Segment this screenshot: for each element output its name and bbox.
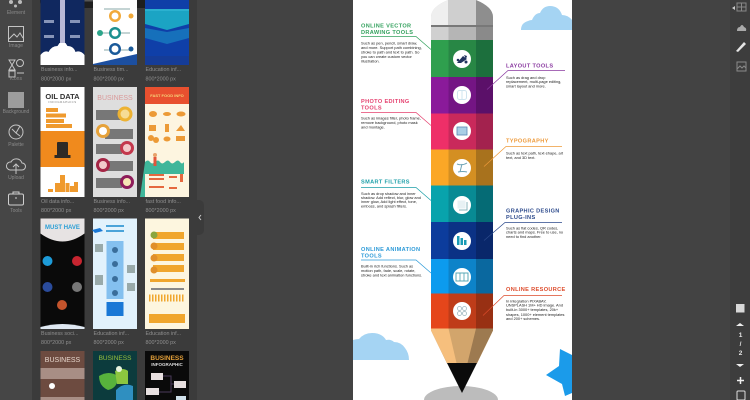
band: orange bbox=[431, 150, 493, 186]
label: tools: Tools bbox=[10, 208, 22, 214]
thumbnail: oil data bbox=[40, 87, 84, 197]
callout: layout tools: LAYOUT TOOLS bbox=[506, 64, 553, 70]
thumbnail: must have bbox=[40, 218, 84, 329]
callout: typography: TYPOGRAPHY bbox=[506, 138, 549, 144]
callout: layout tools: smart layout and more. bbox=[506, 84, 546, 88]
canvas page bbox=[353, 0, 572, 400]
callout: typography: Such as text path, text-shape, art bbox=[506, 150, 564, 156]
callout: online animation tools: Built-in rich functions. Such as bbox=[361, 264, 413, 268]
thumbnail: oil data: INFOGRAPHICS bbox=[48, 100, 77, 104]
icon: upload bbox=[6, 159, 26, 174]
thumbnail: business black: BUSINESS bbox=[150, 355, 184, 362]
callout: online animation tools: stroke and text animation functions. bbox=[361, 272, 422, 278]
thumbnail: business grey: BUSINESS bbox=[97, 95, 133, 102]
page number: / bbox=[740, 341, 742, 348]
panel handle bbox=[197, 200, 204, 235]
label: element: Element bbox=[7, 10, 26, 16]
callout: online vector drawing tools: ONLINE VECTOR bbox=[361, 24, 411, 30]
thumbnail: business black bbox=[145, 351, 189, 400]
callout: online resource bbox=[483, 287, 566, 321]
callout: layout tools: replacement, multi-page editing, bbox=[506, 79, 561, 84]
icon: smart filter bbox=[453, 196, 471, 214]
graphite tip bbox=[447, 363, 477, 393]
callout: smart filters: SMART FILTERS bbox=[361, 180, 410, 186]
thumbnail labels row 2 bbox=[41, 199, 181, 214]
thumbnail: business brown bbox=[40, 351, 84, 400]
callout: graphic design plug-ins bbox=[484, 208, 563, 240]
cloud bottom left bbox=[353, 333, 409, 360]
eraser bbox=[431, 0, 493, 40]
thumbnail: must have: MUST HAVE bbox=[45, 225, 80, 231]
label: image: Image bbox=[9, 43, 23, 49]
callout: typography bbox=[484, 138, 564, 166]
thumbnail labels row 3: Education inf... bbox=[94, 331, 129, 337]
thumbnail: business grey bbox=[93, 87, 137, 197]
callout: online vector drawing tools: stroke to path and text to path. So bbox=[361, 50, 419, 54]
thumbnail labels row 3: Education inf... bbox=[146, 331, 181, 337]
label: upload: Upload bbox=[8, 175, 24, 181]
callout: layout tools: Such as drag and drop bbox=[506, 75, 545, 80]
callout: online vector drawing tools: Such as pen, pencil, smart draw, bbox=[361, 40, 417, 46]
callout: online vector drawing tools: you can create custom vector bbox=[361, 54, 413, 59]
thumbnail: fast food: FAST FOOD INFO bbox=[150, 93, 184, 98]
icon: animation bbox=[453, 268, 471, 286]
thumbnail: education light blue bbox=[92, 218, 137, 329]
callout: photo editing tools: and montage. bbox=[361, 124, 385, 130]
thumbnail labels row 1 bbox=[41, 67, 181, 82]
page number: 1 bbox=[739, 332, 743, 339]
callout: online vector drawing tools: illustration. bbox=[361, 58, 380, 64]
callout: online resource: In integration PIXABAY, bbox=[506, 298, 547, 304]
callout: graphic design plug-ins: charts and maps. Free to use, no bbox=[506, 230, 563, 234]
callout: online resource: ONLINE RESOURCE bbox=[506, 287, 566, 293]
icon: grid bbox=[736, 304, 744, 312]
thumbnail: business timeline bbox=[93, 0, 137, 65]
callout: online animation tools: motion path, fade, scale, rotate, bbox=[361, 268, 416, 273]
wood bbox=[431, 328, 493, 364]
thumbnail labels row 1: 800*2000 px bbox=[94, 76, 124, 82]
callout: photo editing tools: Such as images filter, photo frame, bbox=[361, 116, 421, 120]
thumbnail labels row 2: 800*2000 px bbox=[94, 208, 124, 214]
icon: bar chart bbox=[453, 232, 471, 250]
thumbnail labels row 2: Business info... bbox=[94, 199, 130, 205]
icon: picture bbox=[737, 62, 746, 71]
icon: layers bbox=[732, 3, 746, 11]
icon: pen bbox=[736, 42, 746, 52]
thumbnail labels row 3: 800*2000 px bbox=[41, 340, 72, 346]
icon: copy bbox=[737, 391, 745, 400]
star bbox=[546, 349, 572, 396]
icon: photo frame bbox=[453, 122, 471, 140]
band: blue bbox=[431, 259, 493, 294]
callout: smart filters: Such as drop shadow and inner bbox=[361, 191, 416, 196]
thumbnail: business green: BUSINESS bbox=[99, 355, 132, 362]
callout: online vector drawing tools bbox=[361, 24, 431, 64]
callout: smart filters: emboss, and splash filters. bbox=[361, 204, 407, 208]
thumbnail labels row 1: Business tim... bbox=[94, 67, 129, 73]
thumbnail labels row 2: 800*2000 px bbox=[41, 208, 72, 214]
icon: element bbox=[9, 0, 22, 8]
label: palette: Palette bbox=[8, 142, 24, 148]
thumbnail labels row 3 bbox=[41, 331, 181, 346]
callout: online resource: UNSPLASH 1M+ HD image. And bbox=[506, 302, 563, 308]
callout: online resource: and 200+ schemes. bbox=[506, 316, 540, 321]
callout: online resource: shapes, 1000+ element templates bbox=[506, 312, 565, 317]
thumbnail: oil data: OIL DATA bbox=[45, 92, 80, 101]
icon: resource bbox=[453, 302, 471, 320]
thumbnail labels row 2: 800*2000 px bbox=[146, 208, 176, 214]
callout: online vector drawing tools: and more. Support path combining, bbox=[361, 45, 422, 50]
callout: smart filters: inner glow, Add light effect, tone, bbox=[361, 199, 417, 204]
icon: palette bbox=[9, 125, 23, 139]
thumbnail: fast food bbox=[140, 87, 189, 197]
band: navy bbox=[431, 222, 493, 259]
thumbnail: business navy bbox=[40, 0, 84, 65]
thumbnail labels row 1: 800*2000 px bbox=[146, 76, 176, 82]
thumbnail: education orange bbox=[145, 218, 189, 329]
thumbnail labels row 1: Education inf... bbox=[146, 67, 181, 73]
icon: typography bbox=[453, 159, 471, 177]
panel header bar bbox=[40, 0, 187, 8]
icon: image bbox=[8, 26, 24, 42]
band: pink bbox=[431, 114, 493, 150]
band: purple bbox=[431, 77, 493, 114]
template panel bbox=[32, 0, 204, 400]
callout: photo editing tools: TOOLS bbox=[361, 106, 382, 112]
thumbnail labels row 3: 800*2000 px bbox=[94, 340, 124, 346]
icon: icons bbox=[9, 60, 24, 77]
thumbnail: business green bbox=[93, 351, 137, 400]
page number: 2 bbox=[739, 350, 743, 357]
arrow: page up bbox=[736, 323, 744, 326]
cloud top right bbox=[521, 6, 572, 30]
thumbnail: business brown: BUSINESS bbox=[45, 357, 81, 364]
arrow: page down bbox=[736, 364, 744, 367]
icon: photo editing bbox=[453, 86, 471, 104]
thumbnail labels row 1: Business info... bbox=[41, 67, 78, 73]
thumbnail labels row 2: fast food info... bbox=[146, 199, 181, 205]
thumbnail labels row 1: 800*2000 px bbox=[41, 76, 72, 82]
pencil bbox=[431, 0, 493, 393]
thumbnail labels row 2: Oil data info... bbox=[41, 199, 74, 205]
icon: vector tools bbox=[453, 50, 471, 68]
left tool rail bbox=[0, 0, 32, 400]
callout: smart filters bbox=[361, 180, 431, 208]
thumbnail labels row 3: 800*2000 px bbox=[146, 340, 176, 346]
callout: typography: text, and 3D text. bbox=[506, 155, 535, 160]
right tool rail bbox=[730, 0, 750, 400]
label: icons: Icons bbox=[10, 76, 22, 82]
callout: online animation tools bbox=[361, 247, 431, 278]
callout: photo editing tools: PHOTO EDITING bbox=[361, 99, 410, 105]
callout: layout tools bbox=[487, 64, 565, 90]
callout: graphic design plug-ins: need to find another. bbox=[506, 234, 541, 239]
band: teal bbox=[431, 186, 493, 222]
band: red bbox=[431, 294, 493, 328]
callout: photo editing tools bbox=[361, 99, 431, 130]
callout: graphic design plug-ins: PLUG-INS bbox=[506, 215, 536, 221]
icon: plus bbox=[737, 377, 744, 384]
label: background: Background bbox=[3, 109, 30, 115]
icon: background bbox=[8, 92, 24, 108]
callout: online animation tools: ONLINE ANIMATION bbox=[361, 247, 420, 253]
icon: tools bbox=[8, 192, 24, 205]
page number bbox=[739, 332, 743, 357]
callout: online vector drawing tools: DRAWING TOOLS bbox=[361, 30, 413, 36]
callout: online animation tools: TOOLS bbox=[361, 254, 382, 260]
callout: smart filters: shadow. Add reflect, blur, glow and bbox=[361, 195, 421, 200]
callout: online resource: built-in 3000+ templates, 20k+ bbox=[506, 307, 559, 312]
pencil shadow bbox=[424, 386, 498, 400]
band: green bbox=[431, 40, 493, 77]
callout: photo editing tools: remove background, photo mask bbox=[361, 120, 418, 125]
callout: graphic design plug-ins: GRAPHIC DESIGN bbox=[506, 208, 560, 214]
thumbnail labels row 3: Business soci... bbox=[41, 331, 78, 337]
thumbnail: business black: INFOGRAPHIC bbox=[151, 362, 184, 367]
icon: user settings bbox=[737, 25, 746, 31]
thumbnail: education blue bbox=[145, 0, 189, 65]
callout: graphic design plug-ins: Such as flat codes, QR codes, bbox=[506, 226, 558, 230]
